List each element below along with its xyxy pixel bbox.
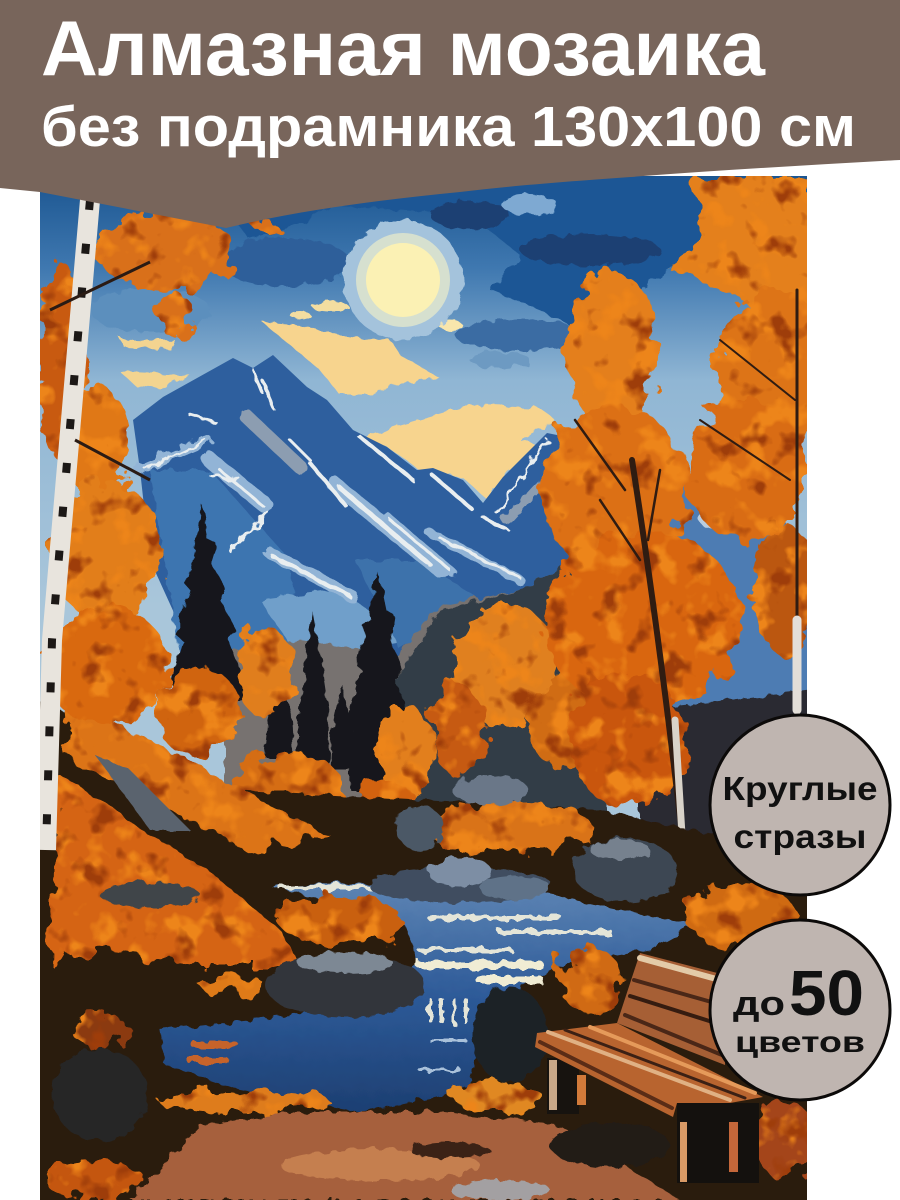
wooden bench <box>535 953 763 1183</box>
badge: round rhinestones: Круглые <box>722 770 878 807</box>
badge: up to 50 colours: до <box>733 985 785 1023</box>
path <box>130 1112 680 1200</box>
river <box>160 880 695 1112</box>
left orange trees <box>38 212 277 725</box>
badge: up to 50 colours <box>710 920 890 1100</box>
mountains <box>133 355 569 656</box>
right big orange trees <box>542 176 827 808</box>
ground <box>30 700 815 1200</box>
right tree trunks <box>575 290 797 835</box>
title: Алмазная мозаика <box>41 4 766 92</box>
fir trees <box>168 503 410 790</box>
badge: up to 50 colours: 50 <box>789 957 864 1029</box>
sky clouds <box>90 176 710 500</box>
badge: round rhinestones: стразы <box>734 818 866 855</box>
moon <box>343 220 463 340</box>
water highlights <box>190 887 610 1070</box>
subtitle: без подрамника 130х100 см <box>41 95 856 159</box>
header banner <box>0 0 900 228</box>
mid-ground orange trees <box>156 603 596 816</box>
orange undergrowth <box>45 705 815 1200</box>
badge: round rhinestones <box>710 715 890 895</box>
distant blue peak behind right trees <box>669 484 807 708</box>
painting: autumn mountain landscape <box>30 176 827 1200</box>
dark forest hillside <box>223 565 807 835</box>
birch trunk <box>46 200 150 850</box>
rocks <box>52 755 677 1141</box>
badge: up to 50 colours: цветов <box>735 1026 865 1059</box>
